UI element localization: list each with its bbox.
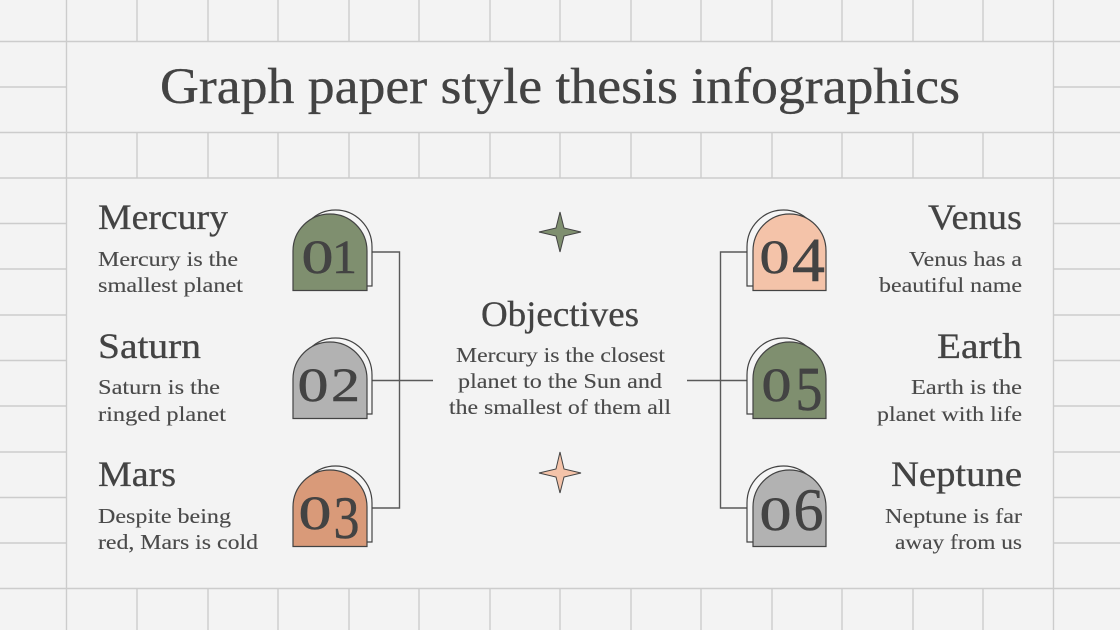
heading: Neptune: Neptune [891, 454, 1022, 494]
icon: 03 arch [293, 466, 372, 551]
panel: Earth [747, 326, 1022, 426]
panel: Mercury [98, 197, 372, 297]
icon: 03 arch: 3 [334, 485, 360, 551]
heading: Objectives: Objectives [481, 294, 639, 334]
text: Neptune description: Neptune is far [885, 504, 1022, 528]
text: Mars description: Despite being [98, 504, 231, 528]
panel: Mars [98, 454, 372, 554]
panel: Neptune [747, 454, 1022, 554]
heading: Earth: Earth [937, 326, 1022, 366]
text: Saturn description: Saturn is the [98, 375, 220, 399]
text: Neptune description: away from us [895, 530, 1022, 554]
connector: left bracket [372, 252, 433, 508]
connector: right bracket [687, 252, 752, 508]
icon: 06 arch [747, 466, 826, 546]
text: Earth description: planet with life [877, 402, 1022, 426]
text: Objectives [449, 294, 671, 419]
heading: Saturn: Saturn [98, 326, 201, 366]
icon: 05 arch [747, 338, 826, 424]
text: Objectives description: Mercury is the closest [456, 343, 665, 367]
text: Saturn description: ringed planet [98, 402, 226, 426]
icon: 04 arch [747, 210, 826, 295]
text: Objectives description: planet to the Sun and [458, 369, 662, 393]
icon: 04 arch: 0 [760, 231, 790, 284]
icon: 02 arch [293, 338, 372, 418]
icon: 02 arch: 0 [298, 359, 328, 412]
heading: Mars: Mars [98, 454, 176, 494]
icon: 06 arch: 0 [760, 488, 792, 541]
text: Earth description: Earth is the [911, 375, 1022, 399]
heading: Venus: Venus [928, 197, 1022, 237]
text: Mercury description: Mercury is the [98, 247, 238, 271]
icon: 03 arch: 0 [298, 487, 332, 540]
icon: 01 arch [293, 210, 372, 290]
heading: Mercury: Mercury [98, 197, 228, 237]
text: Venus description: beautiful name [879, 273, 1022, 297]
text: Objectives description: the smallest of them all [449, 395, 671, 419]
icon: 04 arch: 4 [792, 227, 825, 295]
text: Mars description: red, Mars is cold [98, 530, 258, 554]
icon: 05 arch: 5 [796, 356, 822, 424]
icon: peach star [539, 452, 581, 493]
panel: Saturn [98, 326, 372, 426]
icon: 02 arch: 2 [331, 359, 360, 412]
text: Mercury description: smallest planet [98, 273, 243, 297]
text: Venus description: Venus has a [909, 247, 1022, 271]
panel: Venus [747, 197, 1022, 297]
icon: 05 arch: 0 [762, 359, 792, 412]
icon: green star [539, 212, 581, 252]
icon: 01 arch: 0 [302, 231, 334, 284]
icon: 01 arch: 1 [332, 231, 357, 284]
title: Graph paper style thesis infographics [160, 59, 960, 115]
icon: 06 arch: 6 [794, 477, 824, 543]
